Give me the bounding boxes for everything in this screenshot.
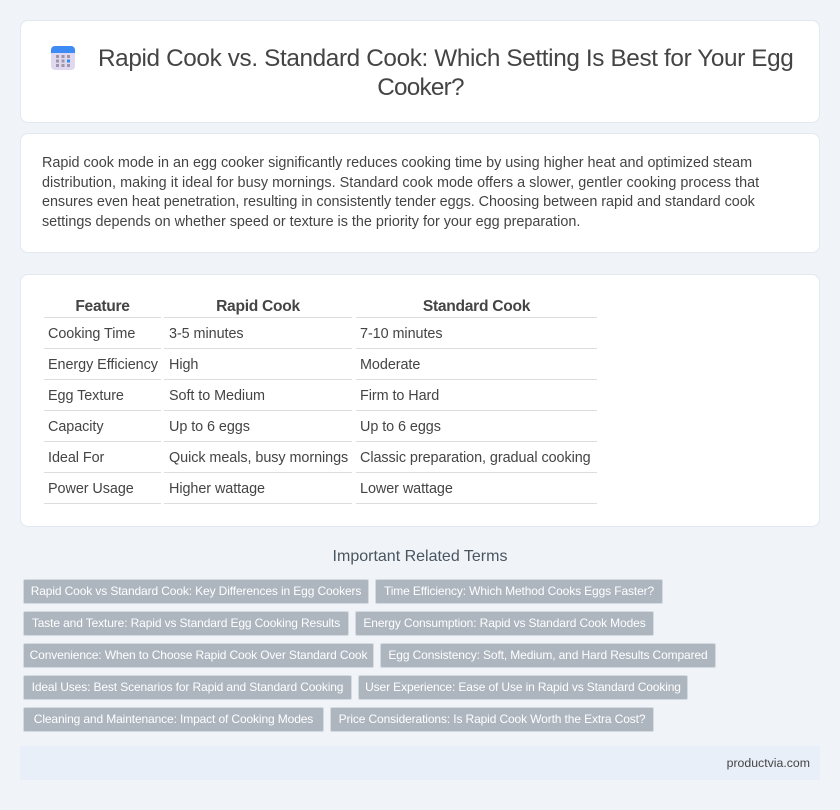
comparison table: Capacity [48,419,104,435]
related term tags: Energy Consumption: Rapid vs Standard Cook Modes [363,616,646,630]
comparison table: Classic preparation, gradual cooking [360,450,591,466]
panel: title card [20,20,820,123]
related term tags: Convenience: When to Choose Rapid Cook Over Standard Cook [30,648,367,662]
icon: calendar grid [51,46,75,70]
comparison table: Up to 6 eggs [169,419,250,435]
comparison table: Higher wattage [169,481,265,497]
comparison table: Up to 6 eggs [360,419,441,435]
summary text: distribution, making it ideal for busy mornings. Standard cook mode offers a slower, gentler cooking process that [42,174,759,190]
summary text [42,155,760,230]
comparison table: 7-10 minutes [360,326,442,342]
comparison table: Lower wattage [360,481,453,497]
related term tags: Time Efficiency: Which Method Cooks Eggs Faster? [384,584,654,598]
comparison table: Feature [75,298,130,315]
related term tags: Cleaning and Maintenance: Impact of Cooking Modes [34,712,313,726]
comparison table: 3-5 minutes [169,326,244,342]
summary text: Rapid cook mode in an egg cooker significantly reduces cooking time by using higher heat and optimized steam [42,155,752,171]
comparison table: Soft to Medium [169,388,265,404]
comparison table: Ideal For [48,450,104,466]
comparison table: Egg Texture [48,388,124,404]
comparison table: Firm to Hard [360,388,439,404]
comparison table: Rapid Cook [216,298,300,315]
summary text: settings depends on whether speed or texture is the priority for your egg preparation. [42,214,580,230]
comparison table: Moderate [360,357,420,373]
comparison table: Cooking Time [48,326,135,342]
footer source: productvia.com [727,756,810,770]
related term tags [23,579,716,732]
related term tags: Taste and Texture: Rapid vs Standard Egg Cooking Results [32,616,340,630]
title [98,45,793,101]
comparison table: Power Usage [48,481,134,497]
comparison table: High [169,357,198,373]
title: Rapid Cook vs. Standard Cook: Which Setting Is Best for Your Egg [98,45,793,72]
panel: comparison table card [20,274,820,527]
comparison table: Quick meals, busy mornings [169,450,348,466]
title: Cooker? [377,74,464,101]
comparison table [44,298,597,504]
comparison table: Standard Cook [423,298,530,315]
related term tags: User Experience: Ease of Use in Rapid vs Standard Cooking [365,680,681,694]
summary text: ensures even heat penetration, resulting in consistently tender eggs. Choosing between rapid and standard cook [42,194,755,210]
comparison table: Energy Efficiency [48,357,158,373]
heading: important related terms: Important Related Terms [333,548,507,565]
related term tags: Egg Consistency: Soft, Medium, and Hard Results Compared [388,648,708,662]
related term tags: Ideal Uses: Best Scenarios for Rapid and Standard Cooking [32,680,343,694]
related term tags: Rapid Cook vs Standard Cook: Key Differences in Egg Cookers [31,584,361,598]
related term tags: Price Considerations: Is Rapid Cook Worth the Extra Cost? [339,712,645,726]
panel: summary card [20,133,820,253]
footer [20,746,820,780]
